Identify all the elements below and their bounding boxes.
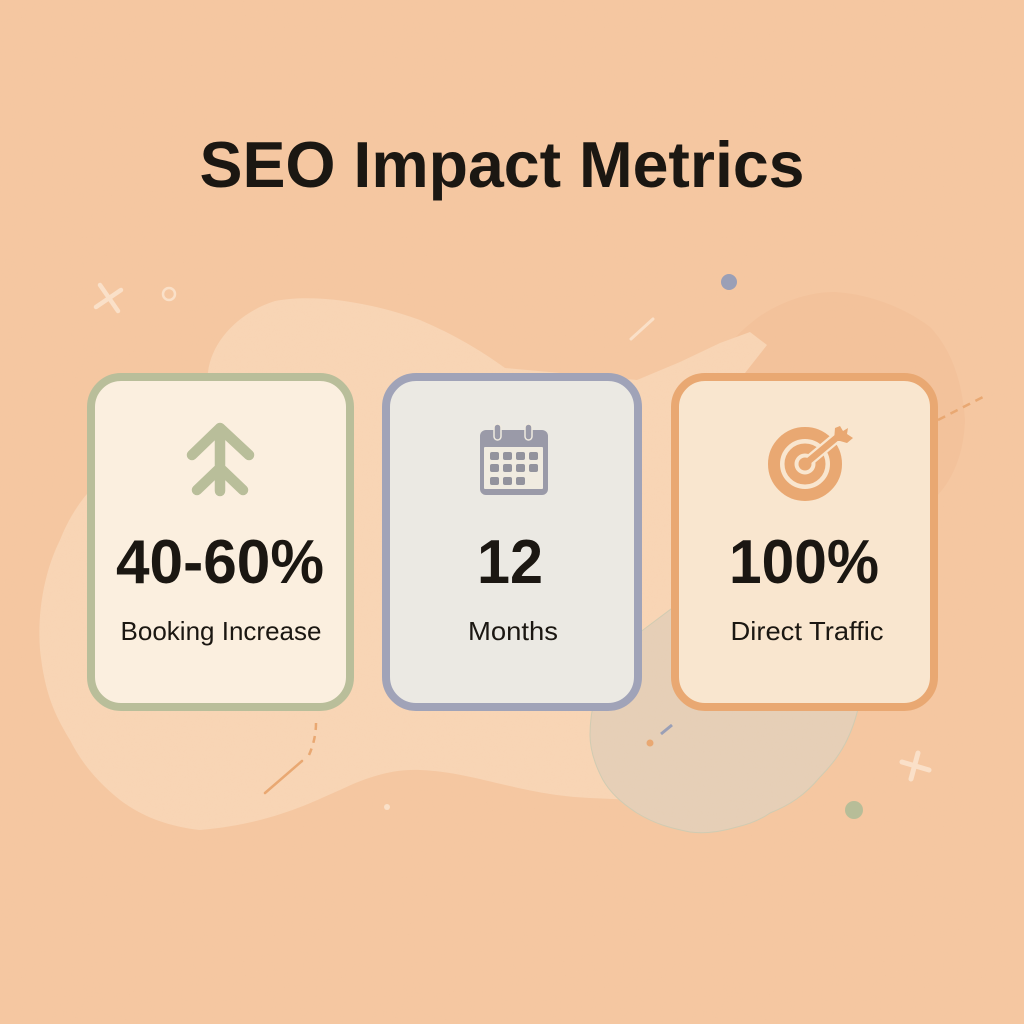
icon: target with arrow [774,426,853,495]
metric label: Booking Increase [120,616,322,646]
decoration: cross top left [96,285,121,311]
decoration: small ring [163,288,175,300]
icon: calendar [480,424,548,495]
metric value: 100% [729,528,879,597]
card frame [91,377,350,707]
decoration: orange dashes bottom left [309,723,316,755]
decoration: blue dash [661,725,672,734]
panel: months [386,377,638,707]
decoration: orange dot [646,740,654,746]
background blob: large light wash [39,298,767,830]
card frame [386,377,638,707]
title: SEO Impact Metrics [200,128,804,201]
panel: booking increase [91,377,350,707]
panel: direct traffic [675,377,934,707]
decoration: tiny light dot [384,804,390,810]
decoration: dashed orange line right [938,397,983,420]
decoration: light dash [631,319,653,339]
decoration: blue dot [721,274,737,290]
icon: double up arrow [192,428,249,491]
decoration: orange line bottom left [265,761,302,793]
decoration: green dot [845,801,863,819]
metric value: 40-60% [116,528,324,597]
card frame [675,377,934,707]
background blob: muted grey-green wash [590,606,860,833]
metric label: Direct Traffic [730,616,884,646]
decoration: cross bottom right [902,753,929,779]
background blob: right tinted wash [700,292,965,500]
metric value: 12 [477,528,543,597]
metric label: Months [468,616,558,646]
